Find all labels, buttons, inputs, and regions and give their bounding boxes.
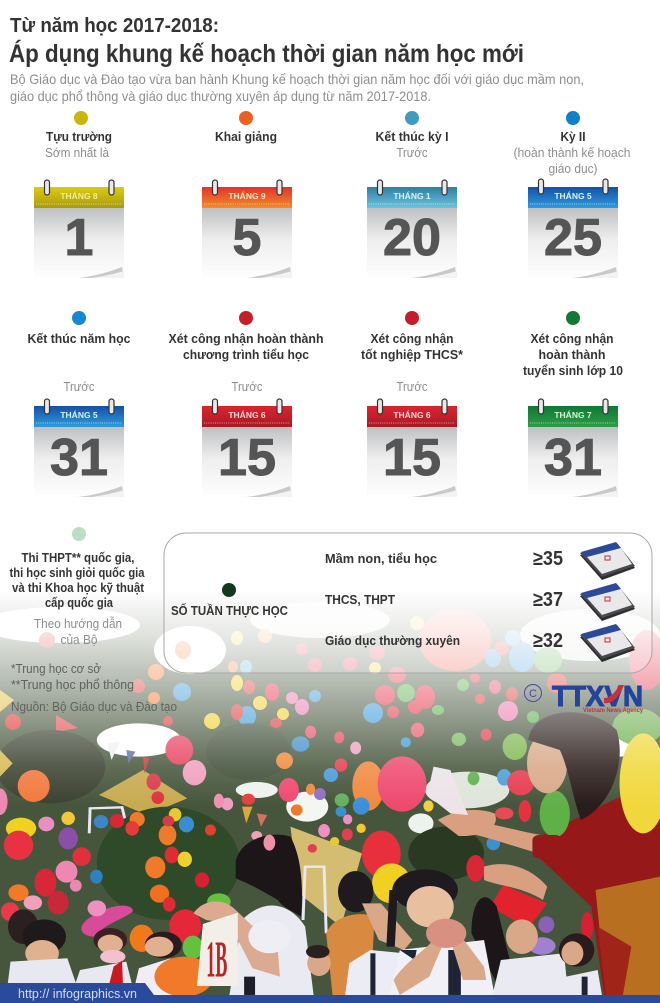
- panel: số tuần thực học: SỐ TUẦN THỰC HỌC: [171, 603, 289, 618]
- item: Xét công nhận hoàn thành tuyển sinh lớp 10: 31: [544, 429, 602, 487]
- adult in floral dress: [338, 871, 373, 912]
- row: Mầm non, tiểu học: ≥35: [533, 548, 563, 570]
- item: Kỳ II: 25: [544, 209, 602, 267]
- teacher: [535, 777, 660, 995]
- logo: TTXVN: TTXVN: [552, 681, 643, 713]
- item: Thi THPT quốc gia: Theo hướng dẫn: [34, 616, 122, 631]
- row: Giáo dục thường xuyên: [325, 624, 635, 662]
- row: Giáo dục thường xuyên: Giáo dục thường xuyên: [325, 633, 460, 648]
- logo: TTXVN: Vietnam News Agency: [583, 708, 644, 714]
- item: Kỳ II: [514, 111, 630, 278]
- item: Thi THPT quốc gia: và thi Khoa học kỹ thuật: [12, 580, 145, 595]
- item: Kỳ II: giáo dục): [548, 161, 598, 176]
- item: Xét công nhận tốt nghiệp THCS: Xét công nhận: [370, 331, 454, 346]
- item: Xét công nhận hoàn thành chương trình tiểu học: chương trình tiểu học: [183, 347, 309, 362]
- item: Tựu trường: Sớm nhất là: [45, 145, 110, 160]
- item: Kết thúc kỳ I: Trước: [396, 145, 428, 160]
- item: Kết thúc kỳ I: [367, 111, 457, 278]
- intro text: giáo dục phổ thông và giáo dục thường xuyên áp dụng từ năm 2017-2018.: [10, 88, 431, 104]
- item: Thi THPT quốc gia: [10, 527, 145, 647]
- footer bar with URL: [0, 983, 660, 1003]
- footer bar with URL: http:// infographics.vn: [18, 986, 137, 1001]
- item: Tựu trường: [34, 111, 124, 278]
- white fade over photo: [0, 540, 660, 805]
- photo upper part: [0, 602, 660, 732]
- title: Từ năm học 2017-2018:: [10, 15, 219, 37]
- photo: students releasing balloons: [0, 590, 660, 1003]
- item: Kết thúc kỳ I: 20: [383, 209, 441, 267]
- item: Khai giảng: [202, 111, 292, 278]
- item: Xét công nhận tốt nghiệp THCS: tốt nghiệp THCS*: [361, 347, 464, 362]
- footnotes and source: [11, 662, 177, 714]
- item: Xét công nhận hoàn thành tuyển sinh lớp 10: hoàn thành: [538, 347, 606, 362]
- panel: số tuần thực học: [164, 533, 652, 673]
- item: Tựu trường: 1: [65, 209, 93, 267]
- row: Giáo dục thường xuyên: ≥32: [533, 630, 563, 652]
- item: Xét công nhận hoàn thành chương trình tiểu học: [168, 311, 324, 497]
- row: THCS, THPT: THCS, THPT: [325, 592, 395, 607]
- balloons behind kids: [130, 925, 154, 952]
- footnotes and source: Nguồn: Bộ Giáo dục và Đào tạo: [11, 700, 177, 714]
- left kids: [8, 909, 38, 944]
- item: Kết thúc năm học: Kết thúc năm học: [28, 331, 130, 346]
- item: Thi THPT quốc gia: cấp quốc gia: [45, 595, 114, 610]
- row: Mầm non, tiểu học: [325, 542, 635, 580]
- photo lower part: [0, 708, 660, 997]
- item: Xét công nhận tốt nghiệp THCS: THÁNG 6: [393, 410, 431, 420]
- item: Xét công nhận tốt nghiệp THCS: [361, 311, 464, 497]
- item: Xét công nhận hoàn thành chương trình tiểu học: Xét công nhận hoàn thành: [168, 331, 324, 346]
- item: Thi THPT quốc gia: thi học sinh giỏi quốc gia: [10, 565, 145, 580]
- item: Xét công nhận hoàn thành tuyển sinh lớp 10: Xét công nhận: [530, 331, 614, 346]
- row: Mầm non, tiểu học: Mầm non, tiểu học: [325, 551, 437, 566]
- girl with sign: [229, 905, 314, 995]
- title: Áp dụng khung kế hoạch thời gian năm học mới: [9, 39, 524, 68]
- intro text: Bộ Giáo dục và Đào tạo vừa ban hành Khung kế hoạch thời gian năm học đối với giáo dục mầm non,: [10, 71, 584, 87]
- logo: TTXVN: C: [529, 688, 537, 700]
- item: Xét công nhận hoàn thành tuyển sinh lớp 10: THÁNG 7: [554, 410, 592, 420]
- footnotes and source: *Trung học cơ sở: [11, 662, 101, 676]
- item: Xét công nhận hoàn thành tuyển sinh lớp 10: [523, 311, 623, 497]
- right kids: [492, 953, 568, 995]
- item: Xét công nhận hoàn thành chương trình tiểu học: 15: [218, 429, 276, 487]
- item: Kết thúc kỳ I: THÁNG 1: [393, 191, 431, 201]
- item: Tựu trường: THÁNG 8: [60, 191, 98, 201]
- item: Xét công nhận tốt nghiệp THCS: 15: [383, 429, 441, 487]
- item: Thi THPT quốc gia: Thi THPT** quốc gia,: [22, 550, 134, 565]
- title: [9, 15, 524, 68]
- item: Khai giảng: THÁNG 9: [228, 191, 266, 201]
- item: Kết thúc kỳ I: Kết thúc kỳ I: [376, 129, 448, 144]
- item: Xét công nhận hoàn thành tuyển sinh lớp 10: tuyển sinh lớp 10: [523, 363, 623, 378]
- item: Xét công nhận tốt nghiệp THCS: Trước: [396, 379, 428, 394]
- center kids: [307, 951, 331, 976]
- item: Kết thúc năm học: 31: [50, 429, 108, 487]
- photo lower part: 1B: [206, 931, 227, 988]
- item: Khai giảng: Khai giảng: [215, 129, 277, 144]
- item: Thi THPT quốc gia: của Bộ: [60, 632, 98, 647]
- item: Xét công nhận hoàn thành chương trình tiểu học: THÁNG 6: [228, 410, 266, 420]
- item: Tựu trường: Tựu trường: [46, 129, 112, 144]
- red balloon square: [490, 885, 547, 928]
- item: Kỳ II: THÁNG 5: [554, 191, 592, 201]
- item: Kết thúc năm học: Trước: [64, 379, 95, 394]
- intro text: [10, 71, 584, 104]
- item: Kỳ II: (hoàn thành kế hoạch: [514, 145, 630, 160]
- item: Xét công nhận hoàn thành chương trình tiểu học: Trước: [232, 379, 263, 394]
- item: Kết thúc năm học: [28, 311, 130, 497]
- sign 1B: [197, 913, 238, 988]
- item: Kỳ II: Kỳ II: [560, 129, 586, 144]
- footnotes and source: **Trung học phổ thông: [11, 678, 134, 692]
- row: THCS, THPT: [325, 583, 635, 621]
- item: Khai giảng: 5: [233, 209, 261, 267]
- row: THCS, THPT: ≥37: [533, 589, 563, 611]
- item: Kết thúc năm học: THÁNG 5: [60, 410, 98, 420]
